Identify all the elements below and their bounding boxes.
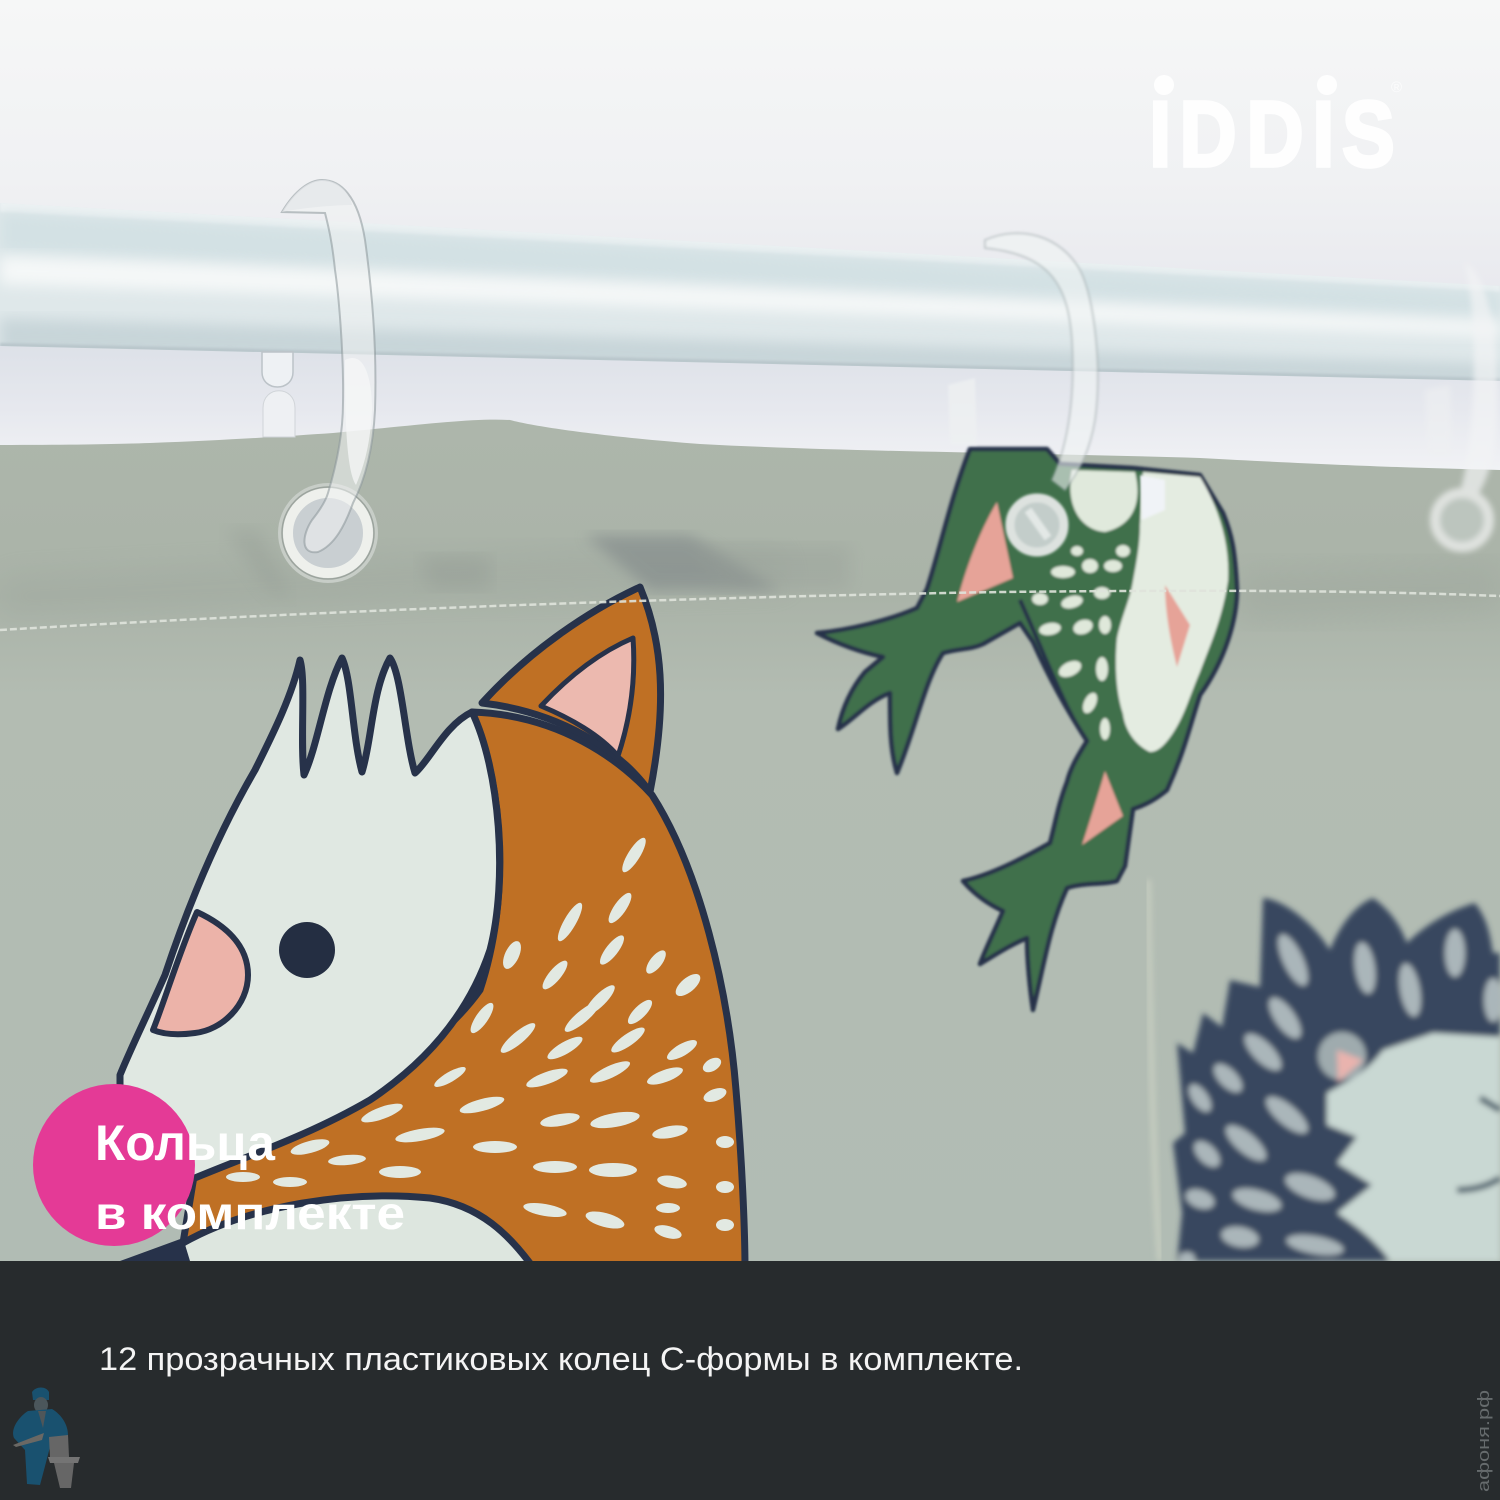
hedgehog illustration <box>1173 898 1500 1264</box>
main animal illustration <box>120 587 745 1270</box>
logo: iddis: IDDIS <box>1149 83 1395 186</box>
curtain fabric <box>0 420 1500 1261</box>
ring 1 <box>262 180 378 583</box>
logo: iddis: ® <box>1391 79 1402 96</box>
pink nose <box>153 912 248 1034</box>
orange ear <box>482 587 661 792</box>
frog illustration <box>817 449 1237 1010</box>
frog belly <box>1116 472 1228 752</box>
hook tip and reflection <box>262 352 293 387</box>
heading: Кольца <box>95 1115 276 1171</box>
orange body <box>150 712 745 1270</box>
ring 2 <box>948 233 1165 552</box>
wall background <box>0 0 1500 300</box>
watermark: афоня.рф <box>1474 1390 1493 1492</box>
heading: в комплекте <box>95 1187 405 1239</box>
body spots <box>226 835 734 1241</box>
icon: plumber with toilet <box>13 1388 80 1488</box>
pink inner ear <box>541 638 634 756</box>
eye <box>279 922 335 978</box>
ring band <box>282 180 375 552</box>
ring 3 <box>1425 262 1498 547</box>
badge: pink circle <box>33 1084 195 1246</box>
eyelet <box>278 483 378 583</box>
lower belly <box>185 1192 533 1261</box>
description text: 12 прозрачных пластиковых колец С-формы в комплекте. <box>99 1341 1023 1377</box>
bottom dark band <box>0 1261 1500 1500</box>
heading <box>95 1115 405 1239</box>
rod <box>0 208 1500 381</box>
white head <box>120 658 500 1180</box>
stitched hem <box>0 591 1500 630</box>
frog pink feet <box>957 502 1013 602</box>
reflection below the rod <box>0 346 1500 470</box>
